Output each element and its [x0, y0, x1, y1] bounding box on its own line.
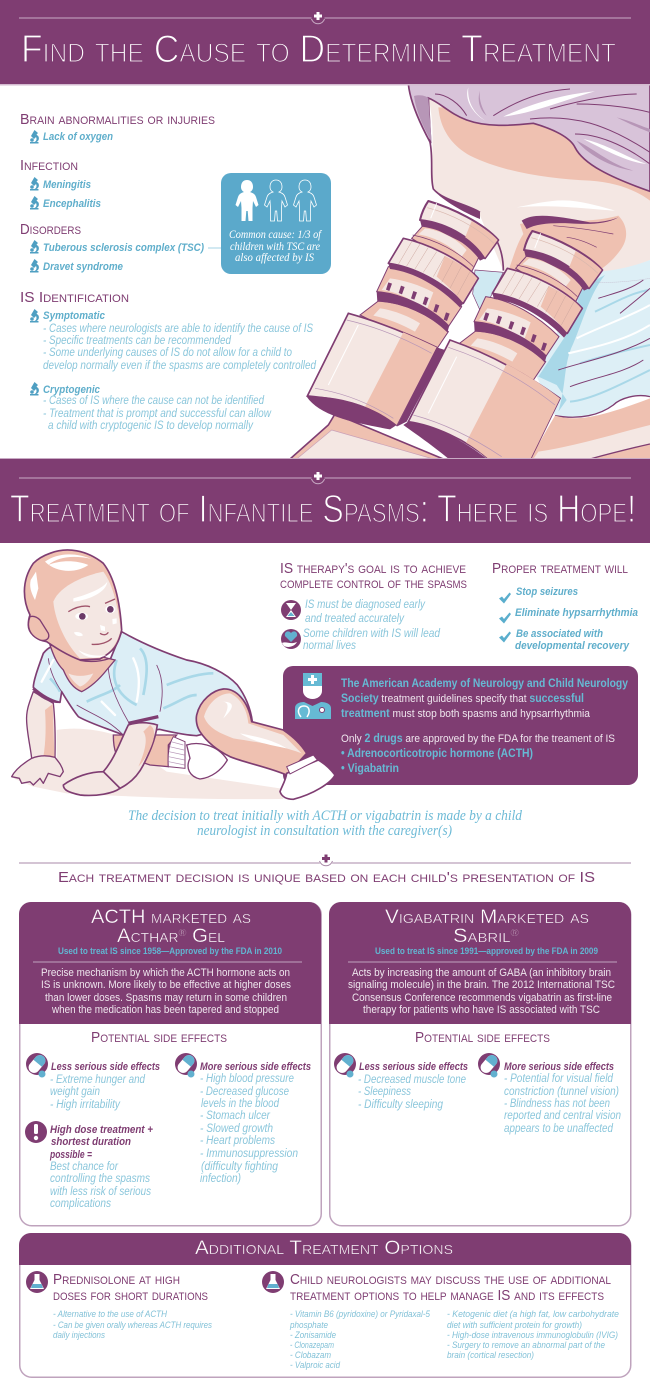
description: signaling molecule) in the brain. The 2012 International TSC — [348, 979, 615, 991]
more serious list: - Stomach ulcer — [200, 1110, 271, 1122]
eye socket — [507, 216, 626, 276]
icon: medical cross — [312, 472, 324, 484]
more serious list: More serious side effects — [200, 1061, 311, 1073]
title: ACTH marketed as — [91, 907, 251, 928]
callout: common cause — [208, 173, 331, 274]
description: than lower doses. Spasms may return in some children — [45, 992, 287, 1004]
left mask corner — [473, 270, 503, 314]
hair strands — [435, 87, 650, 171]
title: Sabril — [453, 926, 503, 947]
options list right: brain (cortical resection) — [447, 1350, 534, 1360]
eyebrow — [522, 216, 618, 229]
drugs text: • Vigabatrin — [341, 763, 399, 775]
more serious list: (difficulty fighting — [201, 1161, 279, 1173]
options list left: phosphate — [289, 1320, 328, 1330]
hair highlights — [30, 554, 92, 600]
guideline text: Society treatment guidelines specify that successful — [341, 693, 584, 705]
icon: exclamation — [25, 1121, 47, 1143]
panel: guidelines — [283, 666, 638, 785]
symptomatic: - Cases where neurologists are able to identify the cause of IS — [43, 323, 313, 335]
divider with cross — [19, 853, 631, 867]
icon: flask — [262, 1271, 284, 1293]
icon: capsule alert — [175, 1053, 197, 1078]
forehead shadow — [438, 107, 650, 201]
cryptogenic: Cryptogenic — [43, 384, 100, 396]
heading: disorders: Disorders — [20, 221, 81, 238]
panel header — [19, 902, 321, 1024]
drugs text — [341, 733, 615, 775]
cryptogenic: a child with cryptogenic IS to develop normally — [48, 420, 254, 432]
icon: check — [499, 592, 511, 604]
icon: capsule check — [26, 1053, 48, 1078]
title: Gel — [186, 926, 225, 947]
heading: prednisolone — [53, 1271, 208, 1304]
heading: brain abnormalities: Brain abnormalities or injuries — [20, 111, 215, 128]
icon: microscope bullet — [30, 309, 39, 322]
more serious list: appears to be unaffected — [504, 1123, 614, 1135]
heading: side effects: Potential side effects — [91, 1029, 227, 1046]
proper treatment column — [492, 560, 638, 652]
face mask — [537, 260, 650, 417]
cryptogenic — [43, 384, 272, 432]
less serious list: - Difficulty sleeping — [358, 1099, 444, 1111]
microscope right barrel — [408, 340, 560, 460]
title: ® — [511, 928, 520, 939]
item: developmental recovery: Be associated with — [516, 628, 603, 640]
description: Consensus Conference recommends vigabatrin as first-line — [352, 992, 612, 1004]
options list left — [289, 1309, 431, 1370]
floor shadow — [13, 729, 283, 799]
microscope left barrel — [307, 313, 437, 425]
barrel separator — [397, 347, 445, 427]
high dose note: complications — [50, 1198, 111, 1210]
title: Vigabatrin Marketed as — [385, 907, 589, 928]
causes list — [20, 111, 317, 432]
callout text: Common cause: 1/3 of — [229, 229, 323, 241]
more serious list — [200, 1061, 311, 1185]
item: developmental recovery — [515, 628, 630, 652]
options list left: - Zonisamide — [290, 1330, 336, 1340]
more serious list: - Heart problems — [200, 1135, 275, 1147]
goal column: complete control of the spasms — [280, 575, 467, 592]
options list right: diet with sufficient protein for growth) — [447, 1320, 582, 1330]
icon: heart in hand — [281, 629, 301, 649]
description: Acts by increasing the amount of GABA (an inhibitory brain — [352, 967, 611, 979]
prednisolone list: - Can be given orally whereas ACTH requires — [53, 1320, 212, 1330]
high dose note: High dose treatment + — [50, 1124, 154, 1136]
less serious list: - Decreased muscle tone — [358, 1074, 466, 1086]
cryptogenic: - Treatment that is prompt and successful can allow — [43, 408, 272, 420]
less serious list: Less serious side effects — [51, 1061, 160, 1073]
prednisolone list — [53, 1309, 212, 1340]
cryptogenic: - Cases of IS where the cause can not be identified — [43, 395, 265, 407]
heading: side effects: Potential side effects — [415, 1029, 550, 1046]
text: diagnosed early: IS must be diagnosed early — [305, 599, 426, 611]
skin under mask — [530, 398, 650, 459]
header band: find the cause — [0, 0, 650, 86]
far leg and foot — [113, 735, 227, 779]
less serious list: Less serious side effects — [359, 1061, 468, 1073]
microscope eyepiece left — [360, 201, 498, 352]
more serious list: - Slowed growth — [200, 1123, 273, 1135]
prednisolone list: daily injections — [53, 1330, 105, 1340]
microscope eyepiece right — [457, 231, 602, 382]
more serious list: infection) — [200, 1173, 241, 1185]
guideline text: treatment must stop both spasms and hypsarrhythmia — [341, 708, 591, 720]
less serious list — [50, 1061, 160, 1111]
heading: proper treatment: Proper treatment will — [492, 560, 628, 577]
icon: microscope bullet — [30, 259, 39, 272]
title: Additional Treatment Options — [195, 1238, 453, 1259]
icon: doctor — [295, 673, 331, 719]
nose bridge shadow — [433, 190, 480, 219]
item: meningitis: Meningitis — [43, 179, 91, 191]
item: encephalitis: Encephalitis — [43, 198, 101, 210]
neck — [50, 645, 115, 692]
illustration: crawling baby — [12, 550, 335, 799]
options list left: - Clobazam — [290, 1350, 331, 1360]
microscope base — [290, 414, 443, 459]
heading: child neurologists — [290, 1271, 611, 1304]
icon: flask — [26, 1271, 48, 1293]
heading: prednisolone: doses for short durations — [53, 1287, 208, 1304]
panel: vigabatrin — [329, 902, 631, 1226]
options list right: - High-dose intravenous immunoglobulin (IVIG) — [447, 1330, 618, 1340]
icon: medical cross — [312, 12, 324, 24]
options list right: - Surgery to remove an abnormal part of the — [447, 1340, 605, 1350]
less serious list — [358, 1061, 468, 1111]
item: developmental recovery: developmental recovery — [515, 640, 630, 652]
item: lack of oxygen: Lack of oxygen — [43, 131, 113, 143]
callout text: also affected by IS — [235, 252, 314, 264]
more serious list: - High blood pressure — [200, 1073, 294, 1085]
high dose note: controlling the spasms — [50, 1173, 150, 1185]
less serious list: - Sleepiness — [358, 1086, 411, 1098]
icon: hourglass — [281, 600, 301, 620]
more serious list: - Potential for visual field — [504, 1073, 614, 1085]
high dose note: possible = — [49, 1149, 92, 1161]
high dose note — [49, 1124, 154, 1210]
goal column: and treated accurately — [305, 613, 405, 625]
high dose note: with less risk of serious — [50, 1186, 151, 1198]
brow highlight — [517, 200, 615, 211]
icon: microscope bullet — [30, 130, 39, 144]
icon: microscope bullet — [30, 240, 39, 254]
drugs text: • Adrenocorticotropic hormone (ACTH) — [341, 748, 533, 760]
icon: check — [499, 632, 511, 642]
item: eliminate: Eliminate hypsarrhythmia — [515, 607, 638, 619]
symptomatic: - Some underlying causes of IS do not allow for a child to — [43, 347, 293, 359]
section rule — [0, 458, 650, 459]
approval note: Used to treat IS since 1958—Approved by the FDA in 2010 — [58, 946, 282, 957]
symptomatic: - Specific treatments can be recommended — [43, 335, 232, 347]
hair side shadow — [414, 95, 432, 142]
decision note — [128, 808, 522, 839]
description: Precise mechanism by which the ACTH hormone acts on — [41, 967, 290, 979]
title: ® — [179, 928, 187, 939]
heading: infection: Infection — [20, 157, 78, 174]
heading: prednisolone: Prednisolone at high — [53, 1271, 180, 1288]
more serious list — [504, 1061, 621, 1135]
icon: check — [499, 612, 511, 624]
options list right — [447, 1309, 619, 1360]
more serious list: - Decreased glucose — [200, 1086, 289, 1098]
icon: three children — [236, 180, 316, 221]
high dose note: Best chance for — [50, 1161, 119, 1173]
heading: child neurologists: Child neurologists may discuss the use of additional — [290, 1271, 611, 1288]
icon: capsule check — [334, 1053, 356, 1078]
icon: microscope bullet — [30, 177, 39, 190]
more serious list: levels in the blood — [201, 1098, 280, 1110]
illustration: scientist looking into microscope — [290, 84, 650, 460]
icon: capsule alert — [478, 1053, 500, 1078]
prednisolone list: - Alternative to the use of ACTH — [53, 1309, 167, 1319]
heading: child neurologists: treatment options to help manage IS and its effects — [290, 1287, 604, 1304]
symptomatic: develop normally even if the spasms are completely controlled — [43, 360, 317, 372]
goal column — [280, 560, 467, 652]
heading: therapy goal: IS therapy's goal is to achieve — [280, 560, 466, 577]
icon: microscope bullet — [30, 382, 39, 396]
title — [91, 907, 251, 947]
drugs text: Only 2 drugs are approved by the FDA for the treament of IS — [341, 733, 615, 745]
panel: additional treatment options — [19, 1233, 631, 1377]
description — [41, 967, 291, 1016]
panel header — [329, 902, 631, 1024]
decision note: The decision to treat initially with ACTH or vigabatrin is made by a child — [128, 808, 522, 824]
description: therapy for patients who have IS associated with TSC — [363, 1004, 600, 1016]
head — [24, 550, 122, 661]
more serious list: - Blindness has not been — [504, 1098, 610, 1110]
heading: IS identification: IS Identification — [20, 289, 129, 306]
title: Acthar — [117, 926, 174, 947]
options list left: - Clonazepam — [290, 1340, 334, 1350]
onesie — [33, 632, 252, 736]
less serious list: - High irritability — [50, 1099, 121, 1111]
options list right: - Ketogenic diet (a high fat, low carbohydrate — [447, 1309, 619, 1319]
panel header — [19, 1233, 631, 1265]
text: normal lives: Some children with IS will lead — [303, 628, 441, 640]
symptomatic: Symptomatic — [43, 310, 105, 322]
symptomatic — [43, 310, 317, 372]
options list left: - Vitamin B6 (pyridoxine) or Pyridaxal-5 — [290, 1309, 431, 1319]
ear — [28, 616, 49, 640]
near thigh — [196, 689, 307, 775]
header band: treatment — [0, 459, 650, 543]
item: stop seizures: Stop seizures — [516, 586, 578, 598]
approval note: Used to treat IS since 1991—approved by the FDA in 2009 — [375, 946, 598, 957]
face — [428, 98, 650, 273]
options list left: - Valproic acid — [290, 1360, 341, 1370]
face outline — [430, 142, 503, 271]
subheading: each treatment decision: Each treatment decision is unique based on each child's presentation of IS — [58, 869, 595, 886]
hair — [408, 84, 650, 191]
decision note: neurologist in consultation with the caregiver(s) — [197, 823, 452, 839]
more serious list: constriction (tunnel vision) — [504, 1086, 619, 1098]
title — [385, 907, 589, 947]
panel: ACTH — [19, 902, 321, 1226]
far arm — [12, 688, 63, 785]
description: IS is unknown. More likely to be effective at higher doses — [41, 979, 291, 991]
near foot — [280, 755, 335, 799]
description: when the medication has been tapered and stopped — [51, 1004, 279, 1016]
more serious list: More serious side effects — [504, 1061, 614, 1073]
item: tuberous sclerosis: Tuberous sclerosis complex (TSC) — [43, 242, 204, 254]
icon: microscope bullet — [30, 196, 39, 210]
more serious list: reported and central vision — [504, 1110, 621, 1122]
less serious list: - Extreme hunger and — [50, 1074, 146, 1086]
description — [348, 967, 615, 1016]
guideline text — [341, 678, 629, 720]
eyes — [75, 605, 115, 620]
callout text — [229, 229, 323, 264]
item: dravet: Dravet syndrome — [43, 261, 123, 273]
brows and mouth — [68, 599, 115, 644]
high dose note: shortest duration — [51, 1136, 131, 1148]
less serious list: weight gain — [50, 1086, 100, 1098]
callout text: children with TSC are — [230, 241, 320, 253]
more serious list: - Immunosuppression — [200, 1148, 298, 1160]
near arm — [63, 717, 158, 795]
goal column: normal lives — [303, 640, 356, 652]
